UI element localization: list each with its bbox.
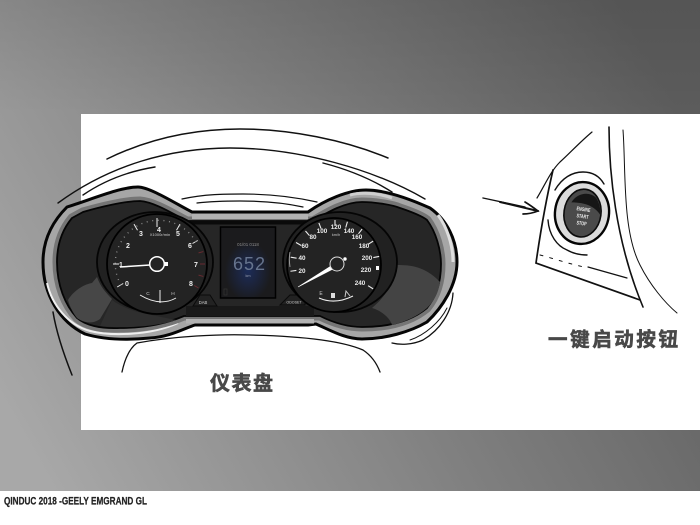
button label: START (576, 213, 589, 221)
speed numerals: 180 (359, 243, 370, 250)
cluster inner gray band (57, 201, 441, 328)
speed numerals: 200 (362, 255, 373, 262)
button outer ring (551, 179, 613, 247)
center top trim (192, 214, 308, 219)
tach hub (150, 257, 168, 271)
speed numerals: 80 (309, 234, 317, 241)
center band shelf (186, 221, 314, 316)
button label (574, 206, 591, 228)
temperature gauge: H (171, 291, 175, 297)
footer credit: QINDUC 2018 -GEELY EMGRAND GL (4, 496, 147, 508)
speed numerals: 220 (361, 267, 372, 274)
temperature gauge (140, 290, 176, 303)
tachometer dial (107, 214, 207, 314)
console panel outlines (536, 127, 677, 313)
right mode button: ODOSET (286, 300, 302, 304)
speed numerals: 240 (355, 280, 366, 287)
tach redline ticks (194, 252, 205, 288)
left lobe low patch (100, 300, 176, 327)
tach numerals: 7 (194, 262, 198, 269)
dashboard caption: 仪表盘 (210, 372, 273, 395)
left lobe light patch (68, 277, 112, 322)
instrument cluster (43, 187, 457, 339)
button top cap (570, 192, 603, 215)
top background shading (0, 0, 700, 114)
start button caption: 一键启动按钮 (548, 328, 678, 351)
cluster outer rim (43, 187, 457, 339)
speed numerals: 140 (344, 228, 355, 235)
right mode button (280, 295, 305, 305)
rim highlight top right (350, 193, 392, 198)
speed numerals: 120 (331, 224, 342, 231)
speed numerals: 100 (317, 228, 328, 235)
tachometer housing (97, 212, 213, 312)
speed numerals: 20 (298, 268, 306, 275)
speed left arc (288, 252, 291, 267)
speedometer dial (287, 218, 381, 312)
tach ticks (113, 218, 198, 287)
console sketch with start button (483, 127, 677, 313)
temperature gauge: C (146, 291, 150, 297)
fuel gauge: E (319, 291, 323, 297)
speed numerals: 160 (352, 234, 363, 241)
button label: STOP (576, 220, 587, 228)
start button (551, 179, 613, 247)
tach numerals: 0 (125, 281, 129, 288)
display status row (224, 289, 227, 295)
crescent lines around button (548, 172, 604, 255)
rpm unit label: X1000r/min (150, 232, 170, 237)
tach numerals: 8 (189, 281, 193, 288)
tach minor dots (115, 220, 196, 285)
display title: 01/01 0118 (237, 242, 259, 247)
speed numerals: 60 (301, 243, 309, 250)
footer strip (0, 491, 700, 525)
right lobe light patch (372, 265, 440, 325)
speed unit label: km/h (332, 233, 340, 237)
center bottom trim (186, 319, 314, 324)
tach numerals (119, 227, 198, 288)
white rim highlight right (438, 215, 453, 262)
tach needle (120, 265, 150, 267)
button label: ENGINE (576, 206, 591, 214)
center display (220, 227, 276, 298)
button face (561, 187, 604, 239)
speed numerals (298, 224, 373, 287)
display reading: 652 (233, 254, 265, 274)
speedometer housing (283, 212, 397, 312)
tach numerals: 6 (188, 243, 192, 250)
speed needle (298, 266, 333, 287)
white panel (81, 114, 700, 430)
left mode button (193, 295, 217, 306)
display unit: km (245, 274, 251, 278)
left mode button: DAB (199, 300, 208, 305)
speed numerals: 40 (298, 255, 306, 262)
cluster dark face (57, 201, 441, 328)
white rim highlight lower left (47, 283, 178, 334)
tach numerals: 1 (119, 262, 123, 269)
windshield sketch lines (53, 129, 453, 375)
speed hub (330, 257, 347, 271)
tach numerals: 3 (139, 231, 143, 238)
arrow pointing to button (483, 198, 538, 214)
tach numerals: 2 (126, 243, 130, 250)
speed ticks (290, 220, 379, 289)
speed limit marker (376, 266, 379, 270)
tach numerals: 4 (157, 227, 161, 234)
tach numerals: 5 (176, 231, 180, 238)
